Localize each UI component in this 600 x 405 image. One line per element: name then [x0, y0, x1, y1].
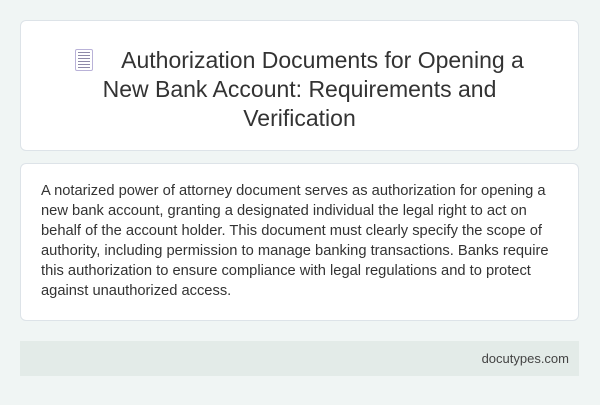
panel: title — [20, 20, 579, 151]
body text: A notarized power of attorney document serves as authorization for opening a new bank account, granting a designated individual the legal right to act on behalf of the account holder. This document must clearly specify the scope of authority, including permission to manage banking transactions. Banks require this authorization to ensure compliance with legal regulations and to protect against unauthorized access. — [41, 183, 549, 299]
footer — [20, 341, 579, 376]
icon: document — [75, 49, 93, 71]
footer text: docutypes.com — [482, 351, 569, 366]
panel: description — [20, 163, 579, 321]
title: Authorization Documents for Opening a New Bank Account: Requirements and Verification — [103, 47, 524, 131]
